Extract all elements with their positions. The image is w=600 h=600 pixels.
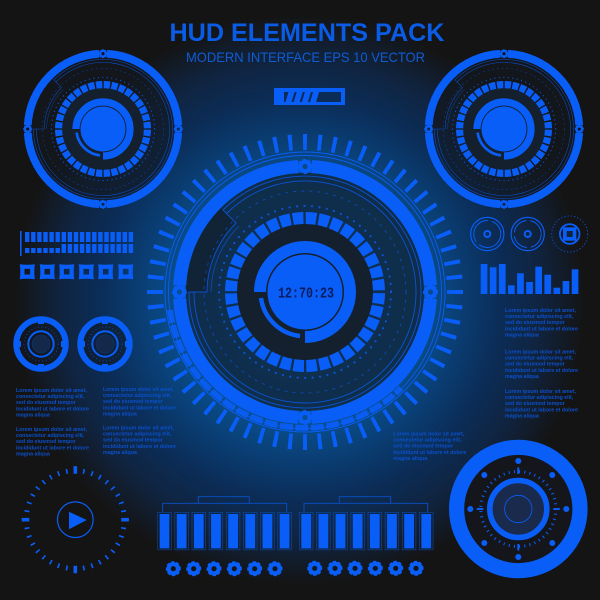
text block: left column 2 top: magna aliqua bbox=[103, 411, 137, 417]
subtitle: MODERN INTERFACE EPS 10 VECTOR bbox=[186, 49, 425, 65]
text block: left column 1 top: incididunt ut labore et dolore bbox=[16, 406, 89, 412]
text block: right top: incididunt ut labore et dolore bbox=[505, 326, 578, 332]
text block: right middle: magna aliqua bbox=[505, 374, 539, 380]
lower segmented band bbox=[170, 310, 401, 428]
gauge: top right bbox=[425, 50, 583, 208]
text block: left column 1 bottom: sed do eiusmod tempor bbox=[16, 439, 76, 445]
text block: left column 1 bottom: magna aliqua bbox=[16, 451, 50, 457]
bar chart bbox=[481, 264, 578, 294]
mini gauge left bbox=[16, 319, 66, 369]
text block: right middle: Lorem ipsum dolor sit amet, bbox=[505, 350, 576, 356]
text block: centre bottom: Lorem ipsum dolor sit amet, bbox=[393, 432, 465, 438]
main central gauge bbox=[155, 142, 455, 442]
text block: right top: magna aliqua bbox=[505, 332, 539, 338]
text block: right bottom: incididunt ut labore et dolore bbox=[505, 407, 578, 413]
ring bbox=[58, 502, 93, 538]
outer ring bbox=[457, 447, 580, 571]
tick ring bbox=[481, 472, 556, 546]
text block: right bottom: Lorem ipsum dolor sit amet, bbox=[505, 389, 576, 395]
icon: play triangle bbox=[69, 512, 87, 529]
text block: left column 2 top: sed do eiusmod tempor bbox=[103, 399, 163, 405]
icon: progress battery bbox=[274, 88, 345, 105]
text block: right top: consectetur adipiscing elit, bbox=[505, 314, 574, 320]
mini gauge right bbox=[80, 319, 130, 369]
thin centre ring bbox=[505, 495, 532, 523]
text block: left column 1 bottom: Lorem ipsum dolor sit amet, bbox=[16, 427, 87, 433]
level bars bbox=[20, 231, 133, 256]
text block: right middle: incididunt ut labore et dolore bbox=[505, 368, 578, 374]
text block: left column 2 top: consectetur adipiscing elit, bbox=[103, 393, 172, 399]
outer radial ticks bbox=[155, 142, 455, 442]
text block: left column 1 bottom: incididunt ut labore et dolore bbox=[16, 445, 89, 451]
text block: right bottom: consectetur adipiscing elit, bbox=[505, 395, 574, 401]
text block: right bottom: sed do eiusmod tempor bbox=[505, 401, 565, 407]
marker dots bbox=[467, 458, 569, 560]
text block: left column 2 bottom: consectetur adipiscing elit, bbox=[103, 432, 172, 438]
text block: centre bottom: consectetur adipiscing elit, bbox=[393, 438, 462, 444]
text block: left column 2 bottom: incididunt ut labore et dolore bbox=[103, 444, 176, 450]
text block: centre bottom: sed do eiusmod tempor bbox=[393, 444, 453, 450]
text block: centre bottom: magna aliqua bbox=[393, 456, 427, 462]
small ticks bbox=[26, 471, 124, 569]
large ticks bbox=[477, 468, 560, 550]
text block: left column 1 bottom: consectetur adipiscing elit, bbox=[16, 433, 85, 439]
outer thin rings bbox=[165, 152, 445, 432]
battery cells bbox=[299, 512, 433, 550]
bracket bbox=[304, 497, 428, 512]
text block: right top: Lorem ipsum dolor sit amet, bbox=[505, 308, 576, 314]
text block: left column 1 top: Lorem ipsum dolor sit amet, bbox=[16, 388, 87, 394]
text block: right bottom: magna aliqua bbox=[505, 413, 539, 419]
text block: left column 2 top: incididunt ut labore et dolore bbox=[103, 405, 176, 411]
digital clock: 12:70:23 bbox=[278, 286, 334, 302]
cell bank right bbox=[299, 497, 433, 550]
text block: left column 2 top: Lorem ipsum dolor sit amet, bbox=[103, 387, 174, 393]
gear row left bbox=[167, 562, 281, 575]
bracket bbox=[163, 497, 287, 512]
inner ring bbox=[490, 480, 547, 538]
gauge: top left bbox=[24, 50, 182, 208]
cell bank left bbox=[158, 497, 291, 550]
gear row right bbox=[308, 562, 422, 575]
text block: left column 2 bottom: magna aliqua bbox=[103, 450, 137, 456]
text block: left column 2 bottom: Lorem ipsum dolor sit amet, bbox=[103, 426, 174, 432]
battery cells bbox=[158, 512, 291, 550]
icons: square row bbox=[20, 264, 133, 279]
text block: right middle: consectetur adipiscing elit, bbox=[505, 356, 574, 362]
text block: left column 1 top: consectetur adipiscing elit, bbox=[16, 394, 85, 400]
title: HUD ELEMENTS PACK bbox=[170, 19, 444, 47]
play dial bbox=[22, 466, 129, 573]
text block: right top: sed do eiusmod tempor bbox=[505, 320, 565, 326]
text block: left column 2 bottom: sed do eiusmod tempor bbox=[103, 438, 163, 444]
large ticks bbox=[22, 466, 129, 573]
text block: right middle: sed do eiusmod tempor bbox=[505, 362, 565, 368]
gauge body bbox=[173, 160, 437, 424]
icon: concentric dial 1 bbox=[471, 217, 504, 251]
icon: concentric dial 2 bbox=[511, 217, 544, 251]
icon: dotted square dial bbox=[552, 216, 588, 252]
text block: left column 1 top: sed do eiusmod tempor bbox=[16, 400, 76, 406]
text block: centre bottom: incididunt ut labore et dolore bbox=[393, 450, 466, 456]
large dial bottom right bbox=[457, 447, 580, 571]
text block: left column 1 top: magna aliqua bbox=[16, 412, 50, 418]
